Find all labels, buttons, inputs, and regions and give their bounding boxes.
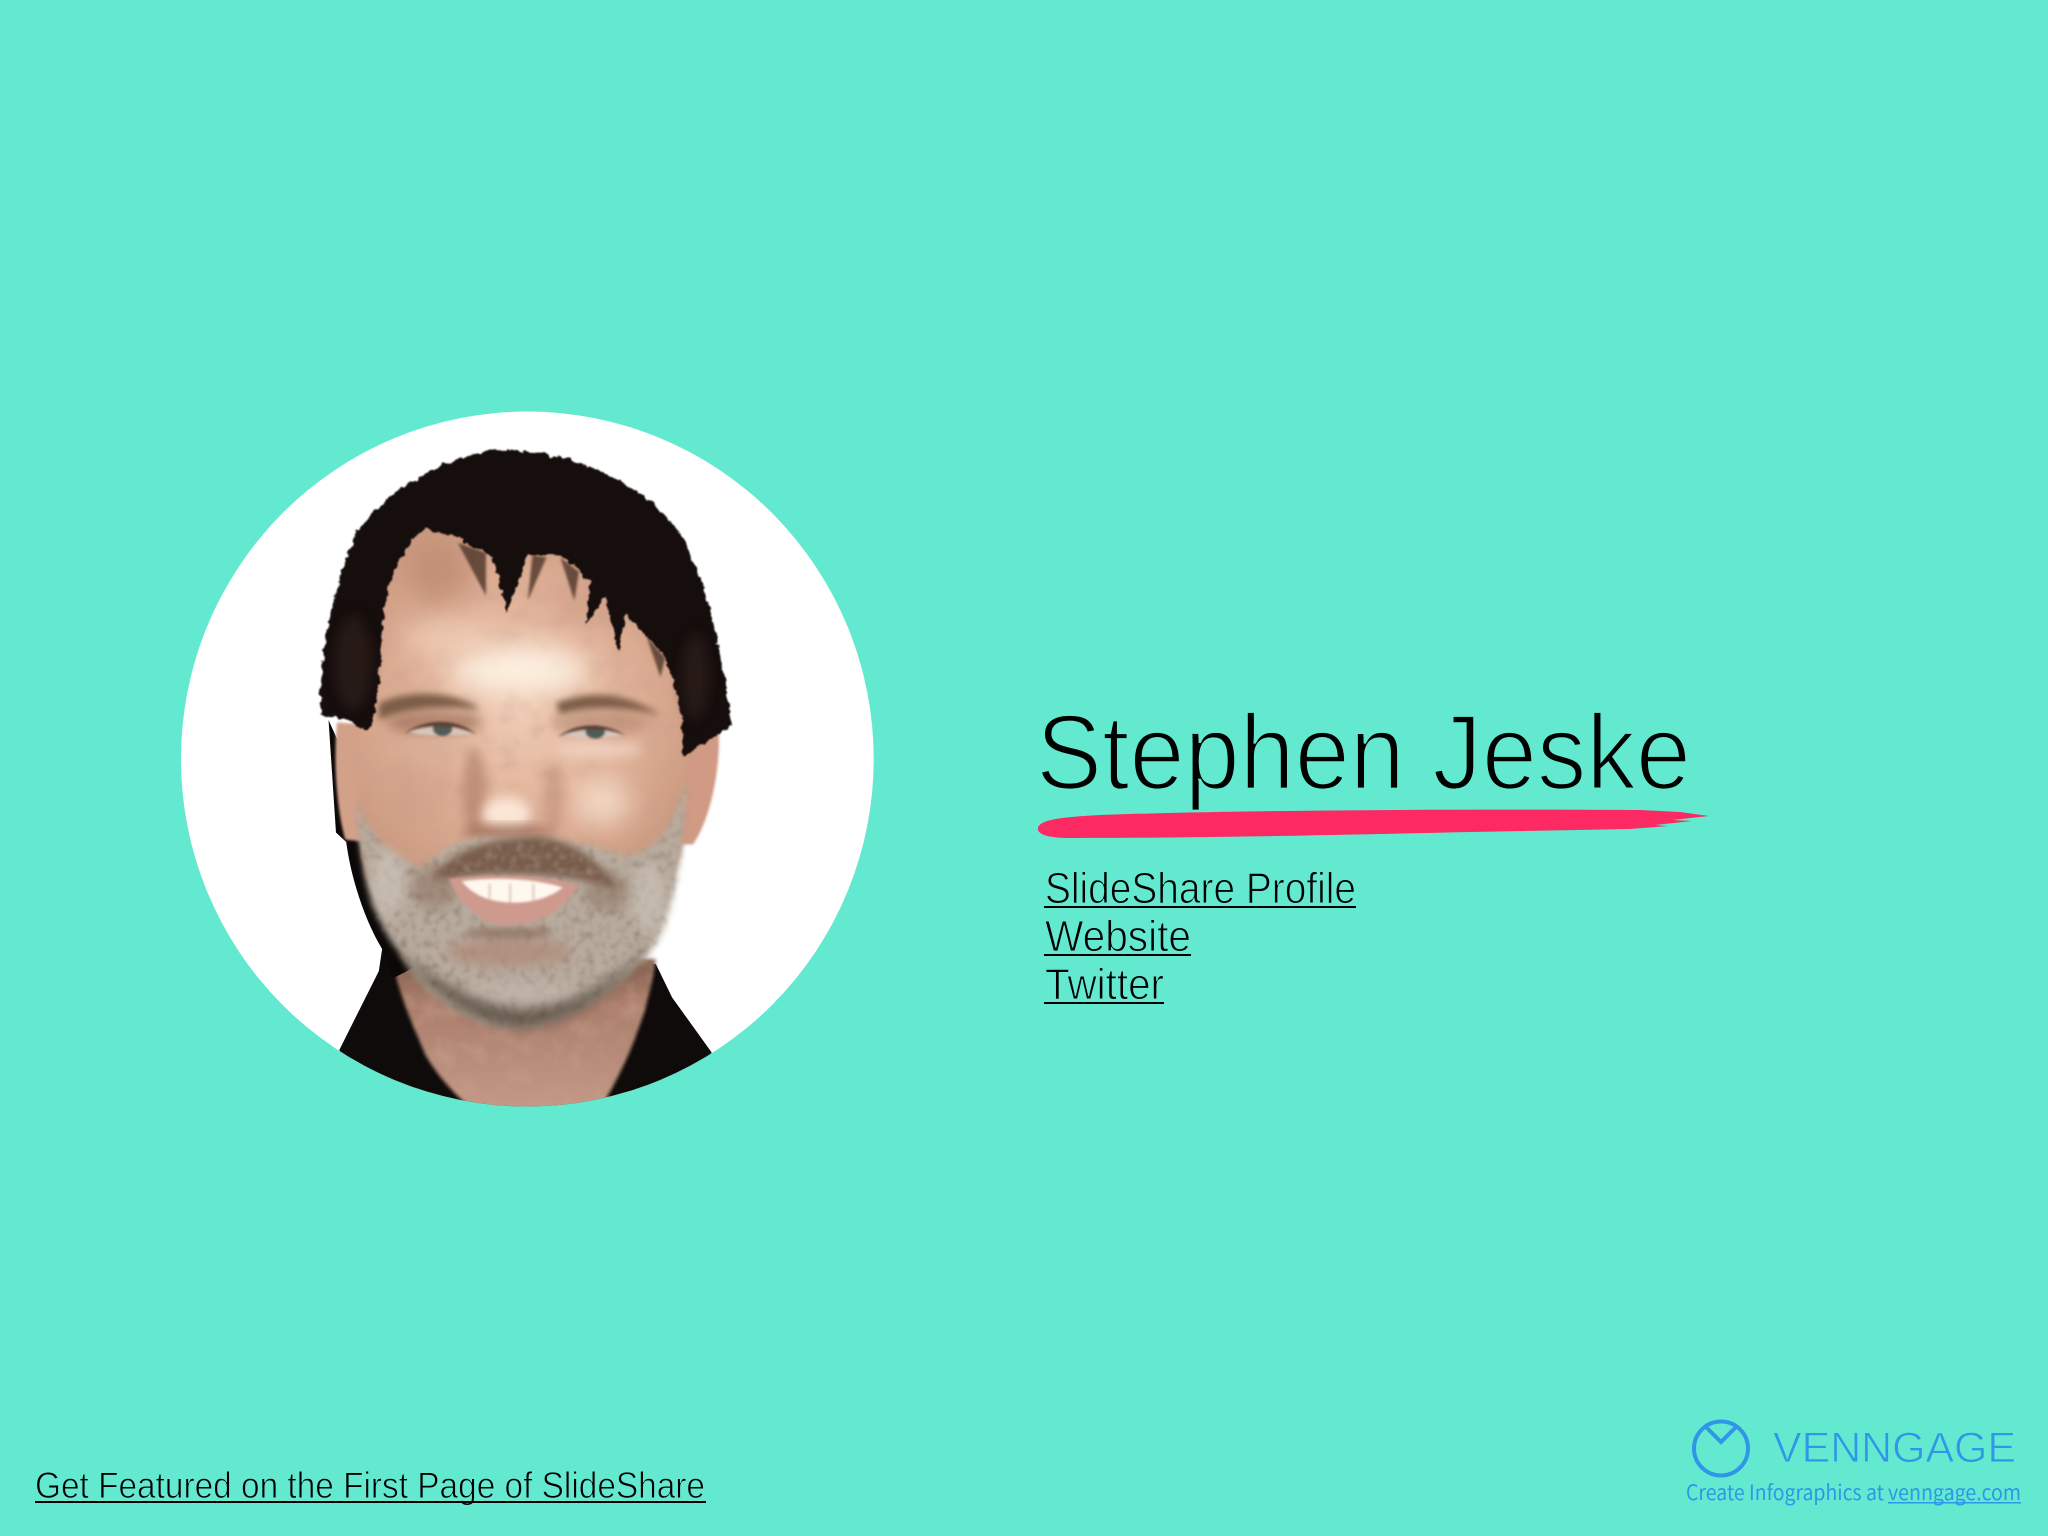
left eye [404,722,477,736]
chin patch [446,938,572,966]
soul patch [465,927,553,939]
neck [390,950,656,1112]
venngage credit line: venngage.com [1888,1477,2021,1507]
left eyebrow [379,694,481,720]
face shading [386,538,649,839]
right eye [558,725,626,739]
eye socket shadows [386,710,484,735]
venngage credit line: Create Infographics at [1686,1477,1884,1507]
fringe strands [458,543,665,677]
shadow beside head [329,720,421,978]
hair highlights [335,615,709,720]
author slide [35,412,2021,1506]
right ear [680,734,721,846]
name heading: Stephen Jeske [1036,692,1691,812]
left ear [334,720,362,843]
beard tone patches [372,849,665,1003]
right eyebrow [556,695,660,715]
link: SlideShare Profile: SlideShare Profile [1045,864,1356,913]
venngage wordmark: VENNGAGE [1773,1424,2016,1472]
beard dark lower edge [397,940,653,1029]
hair [320,450,732,756]
mustache [432,837,619,890]
pink brush stroke [1038,810,1709,838]
venngage logo icon [1694,1422,1748,1476]
link: Website: Website [1045,912,1191,961]
black shirt [339,940,712,1112]
link: Twitter: Twitter [1045,960,1164,1009]
link: feature call to action: Get Featured on the First Page of SlideShare [35,1465,705,1506]
portrait photo [181,412,874,1112]
nose shading [462,749,486,835]
teeth [462,879,563,903]
lips [449,876,579,925]
face [358,526,684,896]
venngage credit line [1686,1477,2021,1507]
beard [358,782,686,1029]
